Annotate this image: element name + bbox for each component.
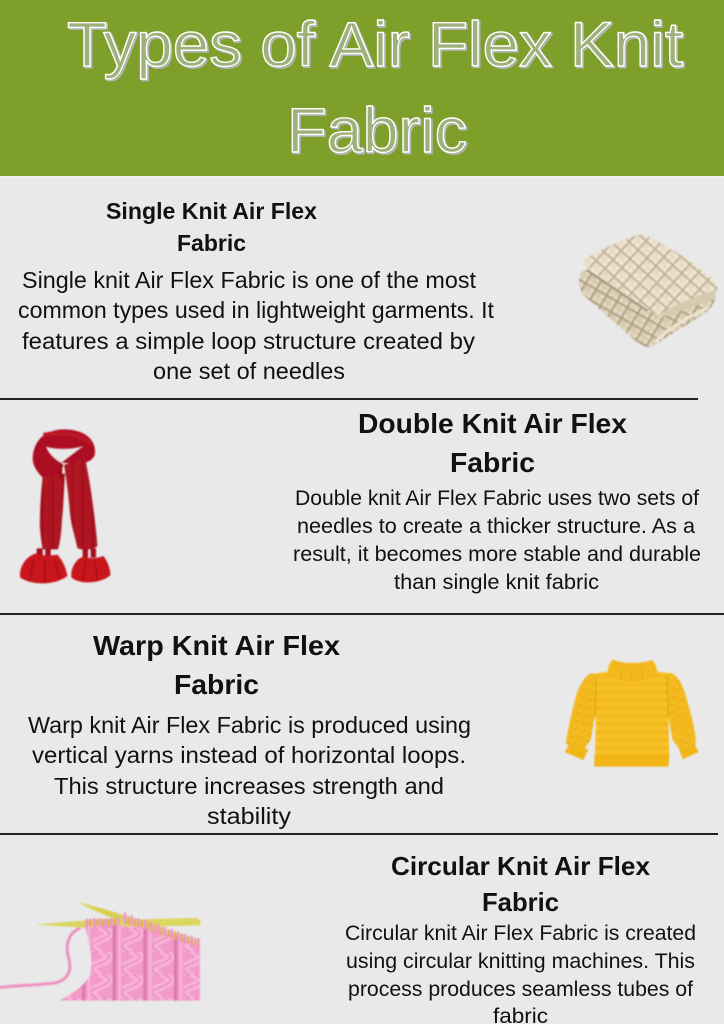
- heading: single knit: [106, 198, 317, 256]
- heading: circular knit: Fabric: [482, 887, 559, 917]
- header banner: [0, 0, 724, 178]
- text: double knit description: needles to create a thicker structure. As a: [297, 514, 695, 538]
- text: circular knit description: Circular knit Air Flex Fabric is created: [345, 921, 696, 945]
- panel: single knit: [18, 198, 717, 384]
- heading: warp knit: [93, 630, 340, 700]
- text: circular knit description: [345, 921, 696, 1024]
- text: double knit description: result, it becomes more stable and durable: [293, 542, 701, 566]
- text: single knit description: features a simple loop structure created by: [22, 328, 475, 354]
- text: warp knit description: [28, 712, 471, 829]
- title: Types of Air Flex Knit: [67, 10, 684, 80]
- title: Fabric: [288, 98, 468, 168]
- text: circular knit description: using circular knitting machines. This: [346, 949, 695, 973]
- title: [67, 10, 685, 168]
- divider 3: [0, 833, 718, 835]
- icon: pink cable knitting on needles: [1, 903, 201, 1001]
- text: single knit description: [18, 267, 494, 384]
- text: single knit description: common types used in lightweight garments. It: [18, 297, 494, 323]
- text: double knit description: than single knit fabric: [394, 570, 599, 594]
- panel: circular knit: [1, 851, 696, 1024]
- heading: circular knit: [391, 851, 651, 917]
- text: warp knit description: vertical yarns instead of horizontal loops.: [32, 742, 466, 768]
- title: Fabric: [287, 96, 467, 166]
- heading: warp knit: Warp Knit Air Flex: [93, 630, 340, 661]
- heading: single knit: Fabric: [177, 230, 246, 256]
- text: single knit description: Single knit Air Flex Fabric is one of the most: [22, 267, 476, 293]
- icon: yellow knit sweater: [565, 659, 699, 767]
- text: double knit description: Double knit Air Flex Fabric uses two sets of: [295, 486, 699, 510]
- icon: folded cream knit blanket: [579, 234, 717, 347]
- divider 1: [0, 398, 698, 400]
- heading: circular knit: Circular Knit Air Flex: [391, 851, 651, 881]
- text: warp knit description: This structure increases strength and: [54, 773, 444, 799]
- text: warp knit description: Warp knit Air Flex Fabric is produced using: [28, 712, 471, 738]
- heading: double knit: [358, 408, 627, 478]
- text: warp knit description: stability: [207, 803, 292, 829]
- icon: red scarf with tassels: [20, 429, 110, 583]
- text: double knit description: [293, 486, 701, 594]
- text: single knit description: one set of needles: [153, 358, 345, 384]
- heading: double knit: Double Knit Air Flex: [358, 408, 627, 439]
- panel: warp knit: [28, 630, 699, 829]
- heading: single knit: Single Knit Air Flex: [106, 198, 317, 224]
- divider 2: [0, 613, 724, 615]
- heading: warp knit: Fabric: [174, 669, 259, 700]
- text: circular knit description: process produces seamless tubes of: [348, 977, 693, 1001]
- heading: double knit: Fabric: [450, 447, 535, 478]
- panel: double knit: [20, 408, 701, 594]
- title: Types of Air Flex Knit: [68, 12, 685, 82]
